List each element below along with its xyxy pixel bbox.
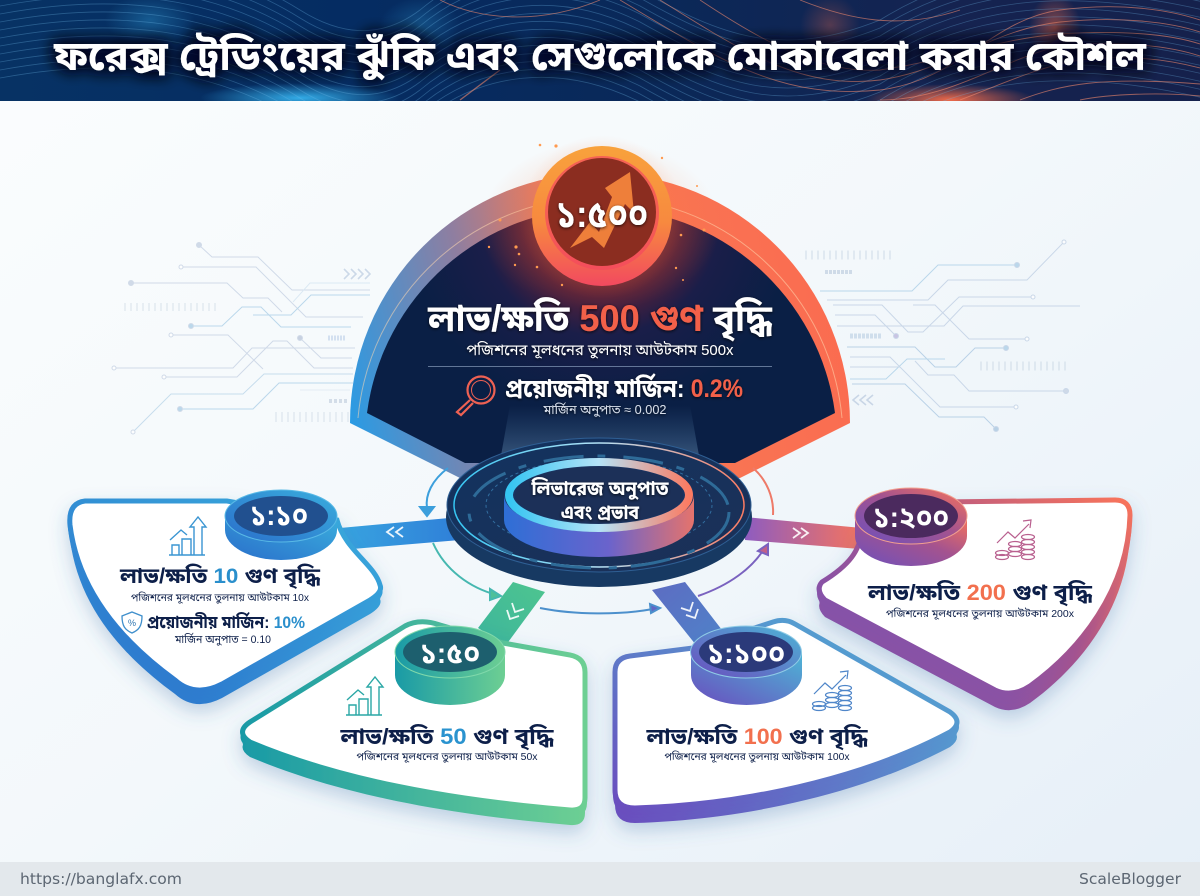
card body <box>615 620 957 823</box>
text block: 1:500 margin: প্রয়োজনীয় মার্জিন: 0.2% <box>505 373 743 403</box>
badge: 1:50: ১:৫০ <box>420 638 480 670</box>
card text: লাভ/ক্ষতি 10 গুণ বৃদ্ধি <box>119 564 321 589</box>
text block: 1:500 margin: মার্জিন অনুপাত ≈ 0.002 <box>542 402 667 418</box>
card text: লাভ/ক্ষতি 100 গুণ বৃদ্ধি <box>645 724 868 751</box>
badge: 1:100: ১:১০০ <box>707 638 785 670</box>
panel: 1:100 card: পজিশনের মূলধনের তুলনায় আউটকাম 100x <box>664 751 850 763</box>
badge: 1:200 <box>855 488 967 566</box>
text block: 1:500 headline <box>427 298 773 359</box>
badge: 1:500: ১:৫০০ <box>556 194 648 236</box>
icon: coins with arrow <box>996 520 1034 560</box>
fan shape <box>350 173 850 478</box>
title: ফরেক্স ট্রেডিংয়ের ঝুঁকি এবং সেগুলোকে মোকাবেলা করার কৌশল <box>53 32 1147 81</box>
text block: 1:500 margin <box>505 373 743 418</box>
light beam <box>497 405 703 478</box>
hub label <box>531 476 669 524</box>
panel: 1:500 top fan <box>350 140 850 478</box>
footer url: https://banglafx.com <box>20 870 182 888</box>
icon: bar chart <box>169 517 206 555</box>
hub top <box>447 438 751 572</box>
badge: 1:10: ১:১০ <box>250 500 308 532</box>
header banner <box>0 0 1200 101</box>
panel: 1:50 card: পজিশনের মূলধনের তুলনায় আউটকাম 50x <box>356 751 538 763</box>
icon: bar chart <box>346 677 383 715</box>
circuit decoration: right <box>805 240 1080 432</box>
text block: 1:500 headline: লাভ/ক্ষতি 500 গুণ বৃদ্ধি <box>427 298 773 342</box>
footer brand: ScaleBlogger <box>1079 870 1182 888</box>
panel: 1:10 card: পজিশনের মূলধনের তুলনায় আউটকাম 10x <box>131 592 309 604</box>
footer bar <box>0 862 1200 896</box>
card body <box>70 501 381 704</box>
connector: purple <box>652 582 722 645</box>
connector: blue <box>340 517 460 550</box>
panel: 1:10 card: মার্জিন অনুপাত = 0.10 <box>174 632 271 646</box>
card body <box>819 500 1130 710</box>
hub side <box>446 447 752 587</box>
panel: 1:100 card <box>615 620 957 823</box>
flow arrow: teal <box>433 543 501 600</box>
flow arrow: blue <box>420 468 448 516</box>
badge: 1:10 <box>225 490 337 560</box>
card text: লাভ/ক্ষতি 200 গুণ বৃদ্ধি <box>867 580 1092 607</box>
central hub <box>446 438 752 587</box>
connector: coral <box>745 517 862 549</box>
margin text: প্রয়োজনীয় মার্জিন: 10% <box>147 612 305 632</box>
connector: teal <box>478 582 545 645</box>
panel: 1:200 card: পজিশনের মূলধনের তুলনায় আউটকাম 200x <box>886 608 1074 620</box>
icon: coins with arrow <box>812 671 852 710</box>
flow arrow: coral <box>753 468 773 515</box>
badge: 1:50 <box>395 626 505 705</box>
icon: shield percent <box>122 612 142 633</box>
icon: shield percent: % <box>128 618 136 628</box>
badge: 1:100 <box>690 626 802 705</box>
sparks <box>488 144 706 286</box>
panel: 1:10 card <box>70 501 381 704</box>
badge: 1:500 <box>520 135 684 299</box>
badge: 1:200: ১:২০০ <box>873 502 949 534</box>
hub label: এবং প্রভাব <box>561 502 640 524</box>
hub label: লিভারেজ অনুপাত <box>531 476 669 500</box>
icon: rising arrow <box>570 172 634 248</box>
panel: 1:50 card <box>242 622 585 825</box>
hub glowing cylinder <box>504 495 694 557</box>
card text: লাভ/ক্ষতি 50 গুণ বৃদ্ধি <box>339 724 554 751</box>
text block: 1:500 headline: পজিশনের মূলধনের তুলনায় আউটকাম 500x <box>466 342 734 359</box>
flow arrow: purple <box>698 544 768 596</box>
card body <box>242 622 585 825</box>
panel: 1:200 card <box>819 500 1130 710</box>
circuit decoration: left <box>112 242 370 434</box>
flow arrow: blue-purple <box>540 604 660 613</box>
icon: magnifier <box>457 376 494 415</box>
